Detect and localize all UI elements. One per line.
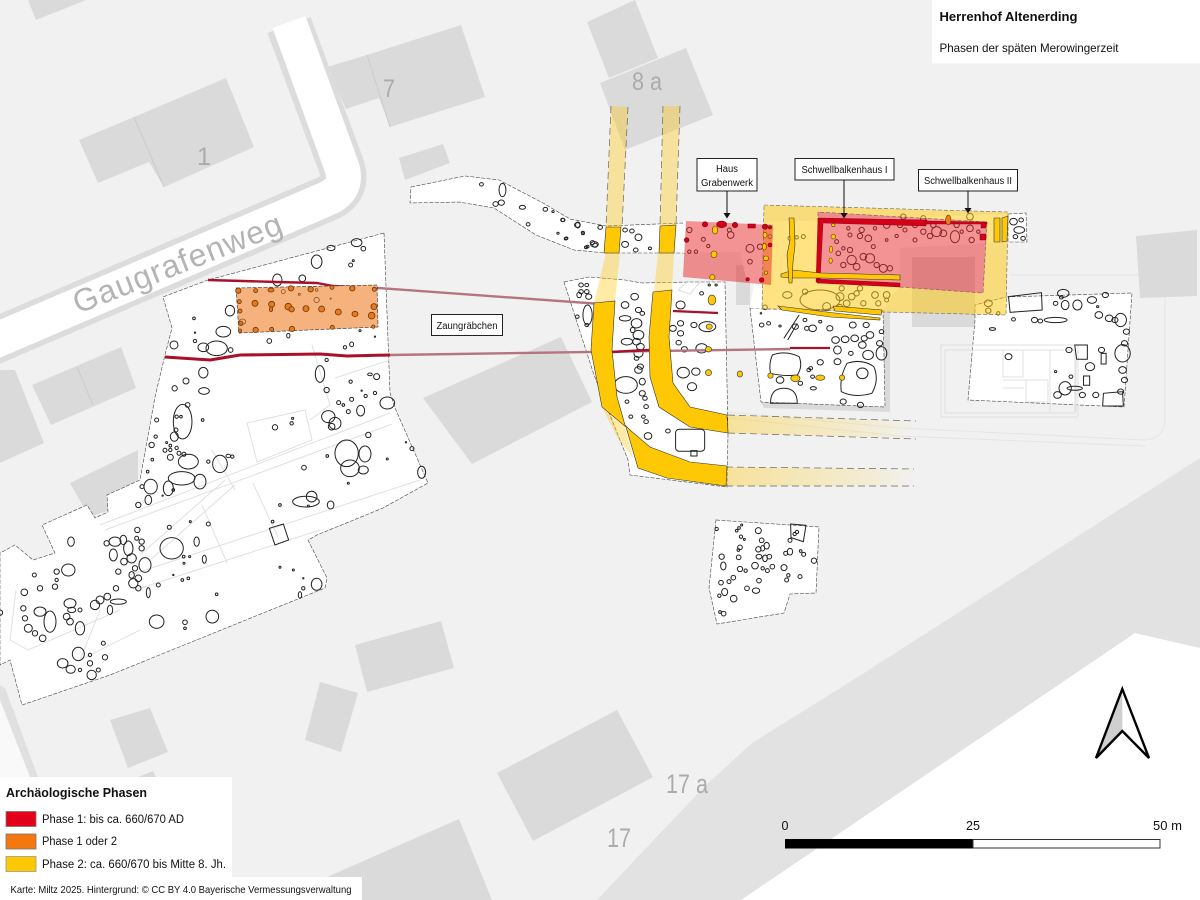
scale bar: 25 — [966, 819, 980, 833]
legend panel: Phase 1: bis ca. 660/670 AD — [42, 814, 184, 826]
palisade ditches: pale projected extent — [594, 106, 916, 486]
map credit: Karte: Miltz 2025. Hintergrund: © CC BY 4.0 Bayerische Vermessungsverwaltung — [10, 884, 352, 896]
scale bar — [782, 819, 1182, 848]
excavation areas — [0, 176, 1132, 705]
features of the western strip — [480, 183, 597, 248]
house numbers: 17 — [607, 823, 631, 853]
street label: Gaugrafenweg — [67, 206, 287, 321]
label: Zaungräbchen — [432, 314, 502, 336]
legend panel — [0, 777, 232, 877]
road: Gaugrafenweg — [0, 22, 343, 343]
features of the central and eastern areas — [561, 218, 1130, 456]
title panel: Herrenhof Altenerding — [940, 9, 1078, 24]
legend panel: Phase 1 oder 2 — [42, 836, 117, 848]
label: Schwellbalkenhaus II — [918, 170, 1018, 214]
house numbers: 8 a — [632, 68, 662, 96]
features of the western area — [0, 239, 426, 680]
house numbers: 7 — [383, 75, 395, 103]
phase 1 and phase 2 posts in the houses — [684, 215, 951, 282]
label: Schwellbalkenhaus I — [795, 158, 894, 218]
label: Haus Grabenwerk: Haus — [716, 164, 738, 175]
label: Haus Grabenwerk: Grabenwerk — [701, 178, 754, 189]
scale bar: 50 m — [1153, 819, 1182, 833]
legend panel: Phase 2: ca. 660/670 bis Mitte 8. Jh. — [42, 859, 226, 871]
legend panel: Archäologische Phasen — [6, 785, 147, 800]
label: Haus Grabenwerk — [697, 158, 757, 218]
palisade ditches: solid phase 2 sections — [591, 225, 728, 486]
orange building, phase 1 or 2 — [236, 285, 378, 333]
scale bar: 0 — [782, 819, 789, 833]
phase 1 walls of Schwellbalkenhaus — [816, 218, 987, 287]
map credit — [0, 877, 362, 900]
phase 2 building overlay — [762, 205, 1008, 315]
phase 1 house overlays — [683, 212, 987, 293]
label: Schwellbalkenhaus II: Schwellbalkenhaus II — [924, 176, 1012, 187]
north arrow — [1096, 689, 1149, 758]
phase 2 isolated features in the central area — [705, 295, 845, 382]
house numbers — [197, 68, 709, 853]
house numbers: 1 — [197, 143, 211, 171]
label: Schwellbalkenhaus I: Schwellbalkenhaus I — [802, 165, 888, 176]
fence trenches (Zaungräbchen) — [165, 280, 830, 360]
title panel — [932, 0, 1200, 64]
features below the house overlays — [687, 213, 1000, 315]
house numbers: 17 a — [666, 769, 709, 799]
faint modern structures inside excavation — [10, 282, 1078, 660]
palisade ditches: dashed projection lines — [606, 106, 916, 486]
features of the southern area — [715, 524, 817, 616]
label: Zaungräbchen: Zaungräbchen — [436, 321, 498, 332]
phase 2 sill beams (yellow features) — [778, 216, 1008, 320]
title panel: Phasen der späten Merowingerzeit — [940, 41, 1119, 55]
